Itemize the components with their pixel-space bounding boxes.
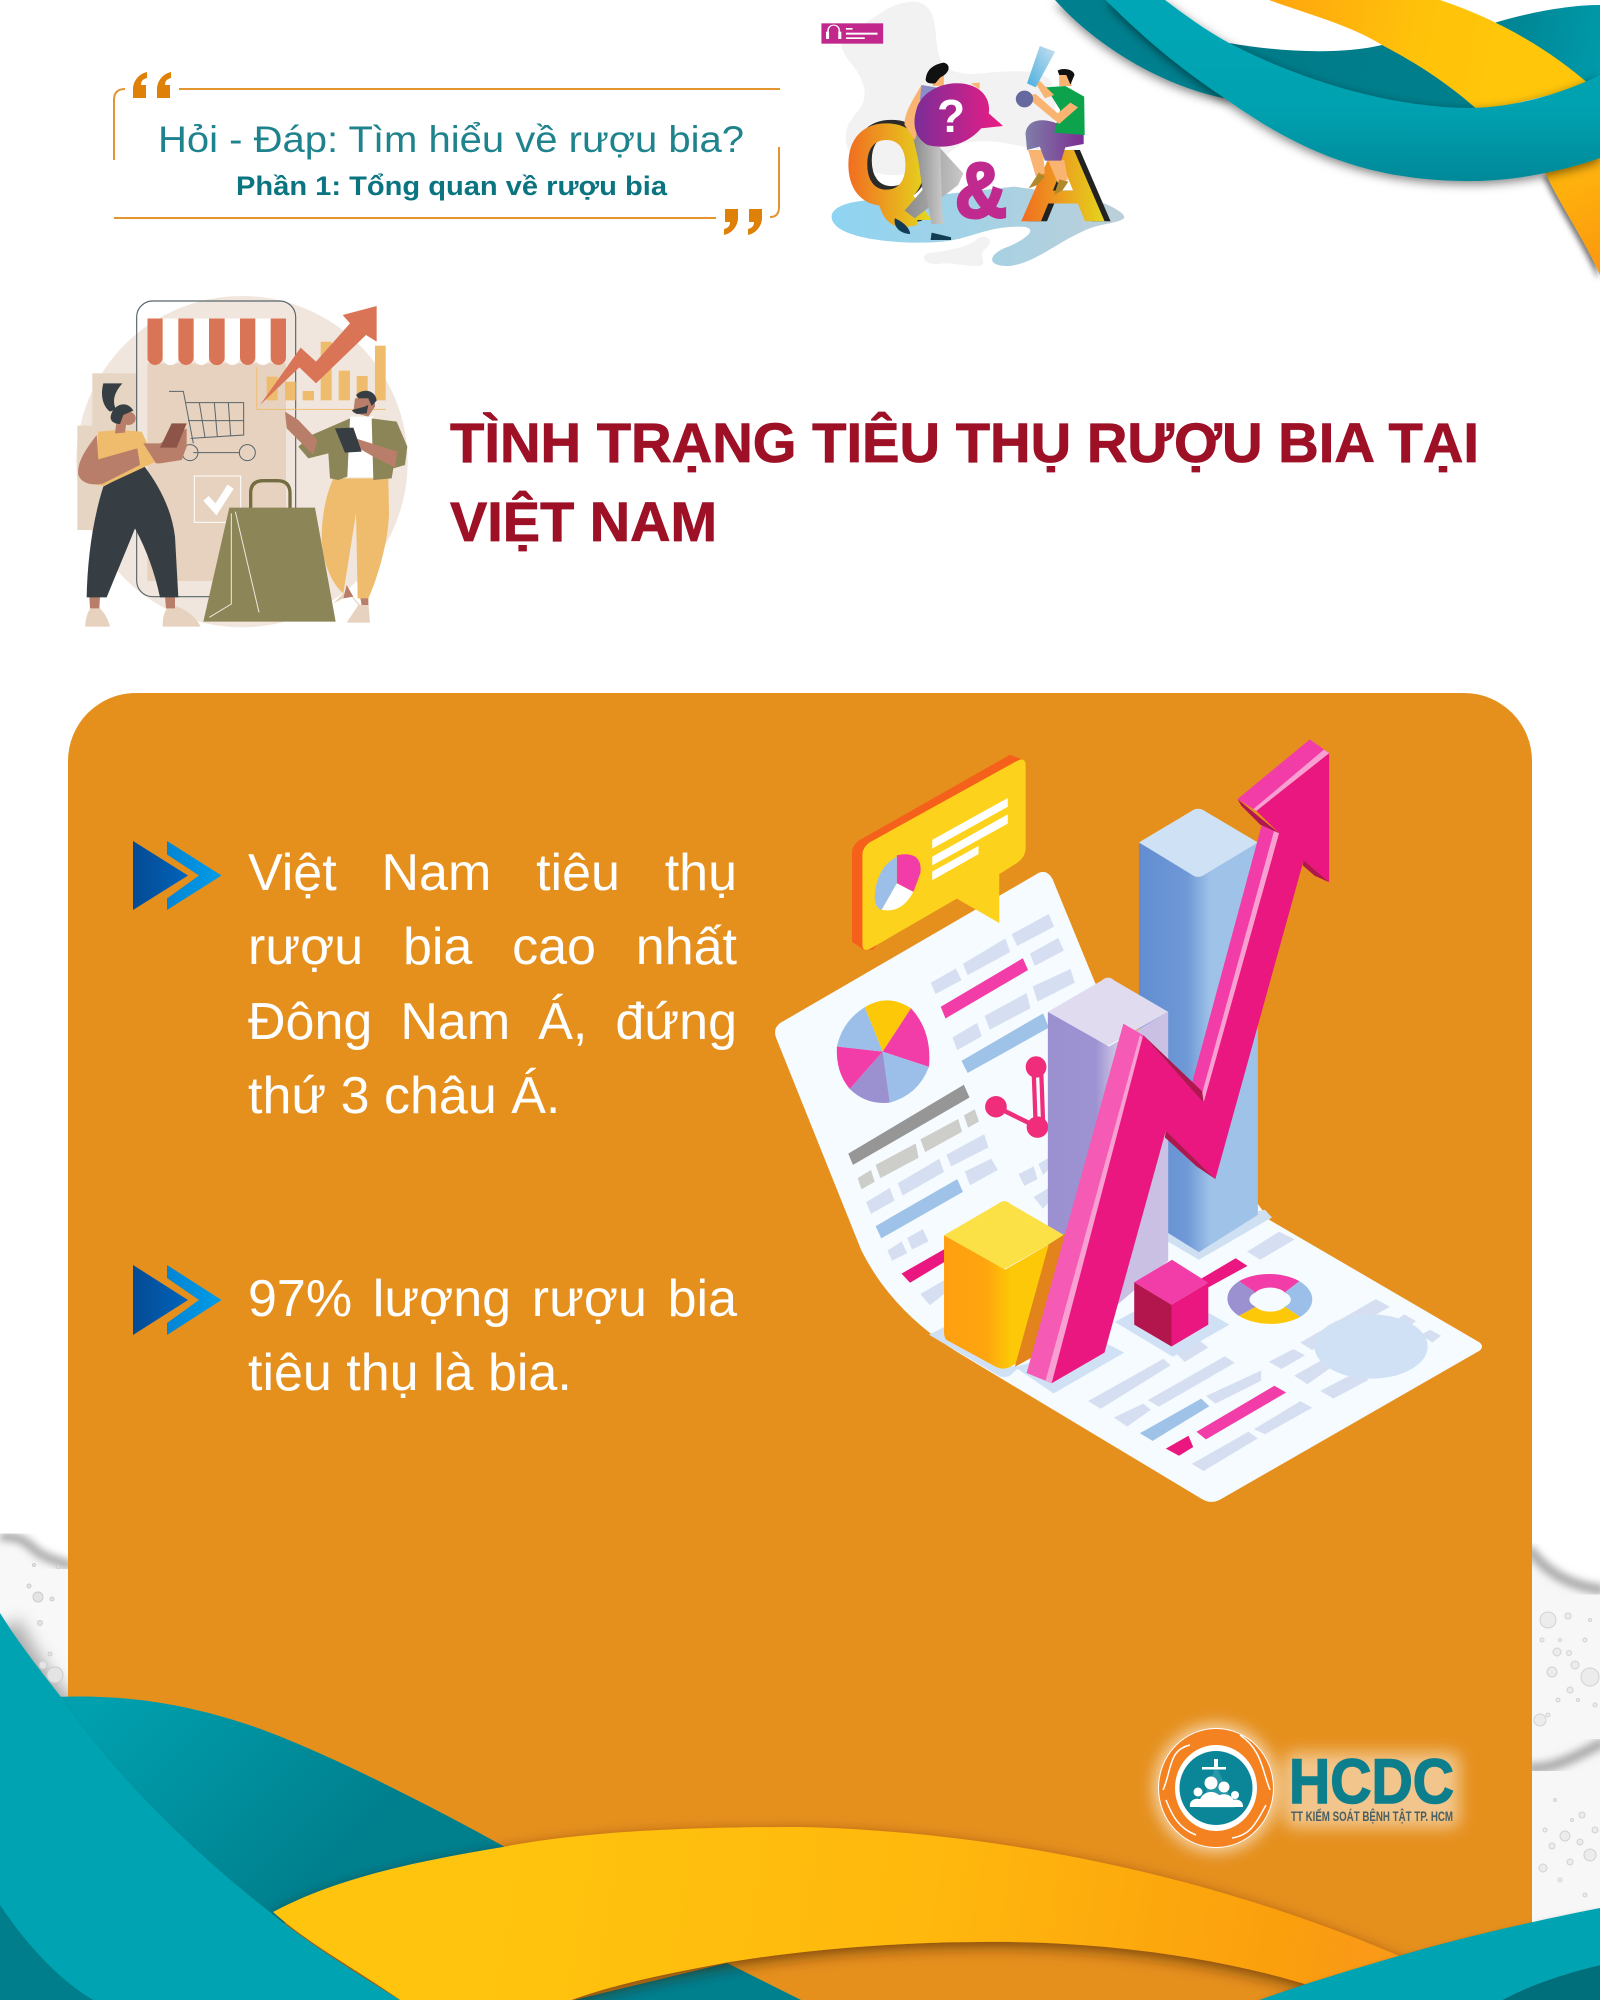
title line 2: VIỆT NAM	[450, 490, 717, 553]
logo emblem	[1158, 1728, 1274, 1848]
letter A: A	[1020, 130, 1106, 242]
woman with phone	[78, 383, 201, 627]
pie chart on paper	[837, 1000, 929, 1103]
left person with question bubble	[895, 63, 980, 240]
paper sheet	[775, 872, 1482, 1502]
logo glow	[1154, 1724, 1460, 1852]
logo wordmark: HCDC	[1289, 1747, 1454, 1817]
shopping bag	[203, 481, 336, 622]
yellow box	[929, 1201, 1067, 1377]
wave: dark teal under yellow	[566, 1963, 805, 2000]
main title	[450, 411, 1479, 553]
letter Q: Q	[846, 103, 927, 227]
network icon	[985, 1056, 1048, 1138]
speech card	[852, 755, 1026, 950]
quote frame lines	[114, 89, 780, 218]
wave: right teal band	[1254, 1908, 1600, 2000]
bar chart and arrow	[257, 306, 386, 409]
check box	[194, 476, 241, 522]
ampersand: &	[955, 146, 1007, 234]
question bubble	[914, 83, 1003, 147]
letter A: A	[1026, 130, 1112, 242]
plates and cube	[1015, 1258, 1247, 1393]
foam texture: right	[1528, 1548, 1600, 1920]
top right waves	[1055, 0, 1600, 275]
shopping cart	[169, 391, 255, 461]
text block: beer share: 97% lượng rượu bia tiêu thụ là bia.	[248, 1270, 737, 1402]
illustration: Q and A	[821, 2, 1124, 266]
blue bar	[1139, 809, 1272, 1260]
logo: HCDC	[1154, 1724, 1460, 1852]
wave: left dark corner	[0, 1905, 97, 2000]
wave: top yellow band	[1269, 0, 1590, 112]
man with tablet	[285, 391, 407, 623]
question mark: ?	[937, 90, 965, 142]
paper accent rows	[848, 958, 1286, 1456]
bottom waves	[0, 1613, 1600, 2000]
icon: bullet arrow 2	[133, 1265, 222, 1335]
rising pink arrow	[1027, 739, 1329, 1383]
wave: left teal band	[0, 1613, 403, 2000]
title line 1: TÌNH TRẠNG TIÊU THỤ RƯỢU BIA TẠI	[450, 411, 1479, 474]
background circle	[76, 296, 408, 627]
wave: yellow band	[273, 1827, 1420, 2000]
buildings	[77, 373, 137, 530]
logo tagline: TT KIỂM SOÁT BỆNH TẬT TP. HCM	[1291, 1807, 1453, 1824]
wave: right dark corner	[1499, 1965, 1600, 2000]
phone storefront	[137, 301, 296, 597]
icon: bullet arrow 1	[133, 841, 222, 910]
wave: back dark teal strip	[1055, 0, 1260, 98]
wave: dark teal inner	[1229, 5, 1600, 115]
panel: orange content card	[68, 693, 1532, 2000]
illustration: online shopping	[76, 296, 408, 627]
letter Q: Q	[851, 99, 932, 223]
pale ellipse	[1314, 1314, 1428, 1379]
wave: right yellow tail	[1545, 150, 1600, 275]
closing quote mark	[724, 209, 762, 235]
donut chart	[1227, 1274, 1312, 1324]
heading text: Hỏi - Đáp: Tìm hiểu về rượu bia?	[158, 119, 744, 160]
paper text rows	[866, 914, 1441, 1471]
subheading text: Phần 1: Tổng quan về rượu bia	[236, 171, 668, 201]
text block: Vietnam consumption ranking: Việt Nam tiêu thụ rượu bia cao nhất Đông Nam Á, đứng thứ 3 châu Á.	[248, 844, 737, 1125]
illustration: isometric report chart	[775, 739, 1482, 1502]
wave: main teal band	[1106, 0, 1600, 181]
header quote box	[114, 72, 780, 235]
opening quote mark	[133, 72, 171, 98]
right person reading tablet	[1016, 46, 1085, 195]
Q&A backdrop and badge	[821, 2, 1124, 266]
lavender bar	[1048, 978, 1168, 1312]
wave: dark teal hump	[55, 1697, 520, 1925]
foam texture: left	[0, 1537, 72, 1720]
